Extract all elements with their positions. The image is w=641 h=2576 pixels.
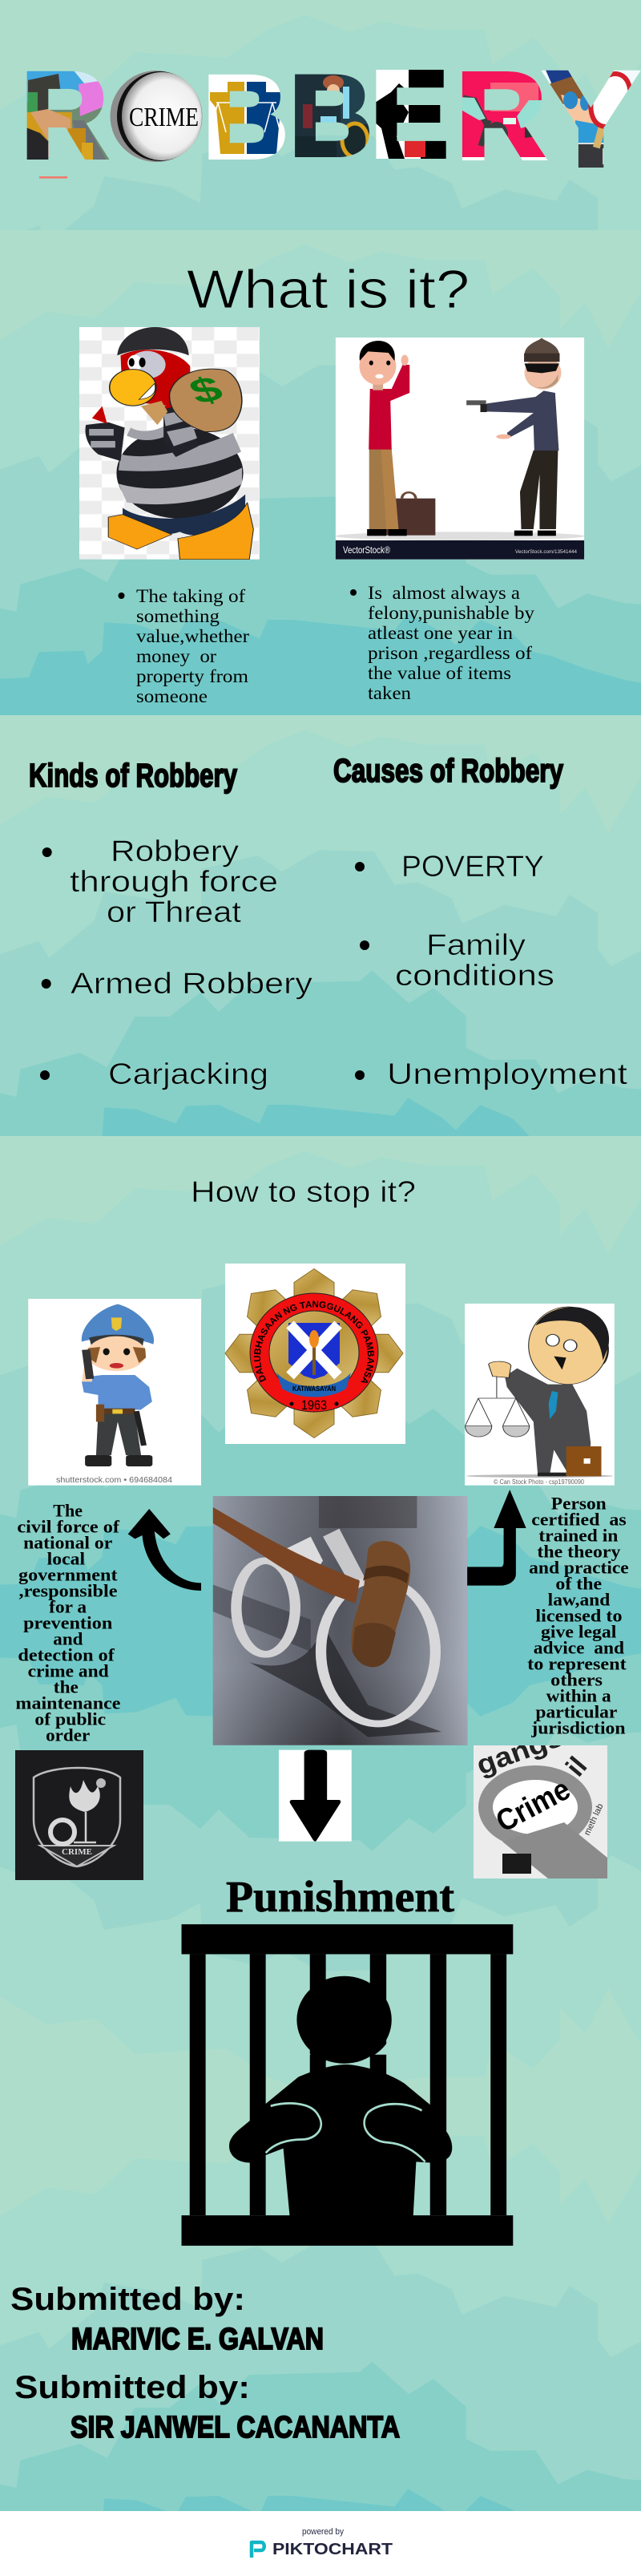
background section 3: [0, 715, 641, 1136]
text block: police definition: detection of: [18, 1645, 115, 1665]
image: PMA emblem: [224, 1264, 405, 1444]
text block: definition right: atleast one year in: [368, 623, 514, 643]
text block: definition left: value,whether: [136, 626, 249, 646]
watermark: VectorStock: VectorStock®: [343, 544, 390, 556]
text block: definition left: [119, 586, 249, 706]
title: ROBBERY picture letters: B: [203, 51, 288, 183]
text block: definition right: Is almost always a: [368, 583, 520, 603]
list: causes of robbery: conditions: [395, 959, 554, 992]
text block: police definition: national or: [23, 1533, 113, 1553]
watermark: VectorStock: [343, 544, 577, 556]
image: police officer: [28, 1299, 201, 1486]
icon: prisoner behind bars: [182, 1924, 513, 2246]
image: handcuffs and crime newspaper: Crime: [491, 1773, 576, 1839]
text block: police definition: government: [18, 1565, 118, 1585]
list: kinds of robbery: or Threat: [107, 896, 242, 928]
text block: definition left: The taking of: [136, 586, 245, 606]
text block: definition right: prison ,regardless of: [368, 643, 532, 663]
text block: definition right: felony,punishable by: [368, 603, 535, 623]
accent dash: [39, 176, 67, 178]
credit: submitted to teacher: Submitted by:: [14, 2370, 250, 2405]
background section 1: [0, 0, 641, 230]
image: gavel and handcuffs: [213, 1496, 467, 1745]
text block: definition right: taken: [368, 683, 412, 703]
footer: Piktochart: powered by: [302, 2527, 344, 2537]
text block: police definition: the: [54, 1677, 79, 1697]
image: PMA emblem: 1963: [301, 1397, 327, 1413]
text block: lawyer definition: jurisdiction: [530, 1718, 626, 1738]
text block: lawyer definition: others: [550, 1670, 603, 1690]
bullet: [350, 589, 357, 596]
arrow: curved to police: [128, 1509, 201, 1591]
text block: lawyer definition: licensed to: [535, 1606, 623, 1626]
teacher name: SIR JANWEL CACANANTA: [71, 2411, 400, 2445]
text block: lawyer definition: of the: [555, 1574, 602, 1594]
text block: police definition: civil force of: [17, 1517, 120, 1537]
icon: Piktochart logo: [252, 2542, 264, 2558]
text block: lawyer definition: and practice: [529, 1558, 629, 1578]
image: handcuffs and crime newspaper: meth lab: [583, 1802, 606, 1837]
text block: lawyer definition: [527, 1494, 629, 1738]
image: handcuffs and crime newspaper: gangs: [473, 1722, 567, 1781]
list: causes of robbery: Unemployment: [387, 1057, 628, 1090]
text block: police definition: crime and: [28, 1661, 109, 1681]
text block: definition left: property from: [136, 666, 248, 686]
watermark: VectorStock: VectorStock.com/13541444: [515, 549, 577, 555]
bullet: [119, 592, 125, 599]
text block: police definition: local: [47, 1549, 85, 1569]
list: kinds of robbery: Robbery: [111, 835, 240, 867]
footer: Piktochart: PIKTOCHART: [272, 2541, 393, 2558]
list: kinds of robbery: Armed Robbery: [71, 967, 313, 1000]
credit: submitted to teacher: [14, 2370, 400, 2445]
heading: What is it?: What is it?: [187, 259, 470, 320]
text block: lawyer definition: advice and: [534, 1638, 624, 1658]
text block: police definition: of public: [34, 1709, 106, 1729]
text block: lawyer definition: to represent: [527, 1654, 627, 1674]
gap between head and body: [308, 2042, 388, 2075]
text block: police definition: for a: [49, 1597, 87, 1617]
title: ROBBERY picture letters: B: [289, 53, 373, 180]
image: PMA emblem: DALUBHASAAN NG TANGGULANG PAMBANSA NG PILIPINAS: [254, 1300, 374, 1383]
text block: definition left: someone: [136, 686, 208, 706]
text block: lawyer definition: the theory: [537, 1542, 620, 1562]
heading: Kinds of Robbery: Kinds of Robbery: [29, 757, 237, 794]
text block: definition left: something: [136, 606, 220, 626]
heading: Causes of Robbery: Causes of Robbery: [333, 752, 563, 789]
list: kinds of robbery: Carjacking: [108, 1057, 268, 1090]
list: kinds of robbery: [40, 835, 313, 1090]
list: causes of robbery: Family: [426, 928, 526, 961]
title: ROBBERY picture letters: Y: [542, 43, 639, 194]
image: penguin robber: $: [183, 368, 229, 411]
text block: police definition: maintenance: [15, 1693, 121, 1713]
text block: lawyer definition: law,and: [548, 1590, 610, 1610]
caption: Can Stock Photo: © Can Stock Photo - csp19790090: [494, 1478, 584, 1486]
caption: shutterstock: shutterstock.com • 694684084: [56, 1476, 172, 1485]
image: handcuffs and crime newspaper: [474, 1745, 607, 1878]
title letter O: crime disc: CRIME: [129, 103, 199, 132]
image: robbery at gunpoint: [335, 338, 585, 560]
text block: lawyer definition: give legal: [541, 1622, 616, 1642]
credit: submitted by student: [10, 2282, 324, 2356]
heading: Punishment: Punishment: [226, 1872, 455, 1921]
student name: MARIVIC E. GALVAN: [71, 2323, 324, 2356]
emblem star points: [225, 1269, 403, 1438]
text block: lawyer definition: within a: [546, 1686, 611, 1706]
title letter O: crime disc: O: [110, 51, 200, 185]
image: crime badge: [15, 1750, 143, 1880]
list: kinds of robbery: through force: [70, 865, 278, 898]
arrow: down to punishment: [279, 1750, 352, 1842]
text block: police definition: order: [46, 1725, 90, 1745]
text block: definition left: money or: [136, 646, 216, 666]
text block: definition right: [350, 583, 535, 703]
list: causes of robbery: [355, 850, 628, 1090]
text block: lawyer definition: Person: [551, 1494, 607, 1514]
list: causes of robbery: POVERTY: [401, 850, 544, 883]
title: ROBBERY picture letters: [21, 43, 639, 194]
title: ROBBERY picture letters: R: [21, 47, 108, 184]
text block: police definition: and: [53, 1629, 83, 1649]
arrow: elbow to lawyer: [467, 1490, 526, 1586]
background section 4: [0, 1136, 641, 2576]
text block: lawyer definition: trained in: [538, 1526, 618, 1546]
text block: police definition: [15, 1501, 121, 1745]
image: PMA emblem: KATIWASAYAN: [292, 1385, 336, 1393]
image: crime badge: CRIME: [62, 1848, 92, 1857]
text block: police definition: ,responsible: [19, 1581, 118, 1601]
credit: submitted by student: Submitted by:: [10, 2282, 245, 2317]
text block: definition right: the value of items: [368, 663, 511, 683]
image: penguin robber: [79, 327, 260, 560]
text block: lawyer definition: certified as: [531, 1510, 627, 1530]
text block: lawyer definition: particular: [535, 1702, 618, 1722]
footer: Piktochart: [0, 2511, 641, 2576]
background section 2: [0, 230, 641, 715]
title: ROBBERY picture letters: E: [370, 45, 449, 183]
image: handcuffs and crime newspaper: il: [560, 1751, 593, 1782]
heading: How to stop it?: How to stop it?: [191, 1175, 416, 1208]
text block: police definition: The: [53, 1501, 83, 1521]
title: ROBBERY picture letters: R: [456, 47, 546, 184]
image: lawyer with scales: [465, 1304, 615, 1486]
text block: police definition: prevention: [23, 1613, 112, 1633]
